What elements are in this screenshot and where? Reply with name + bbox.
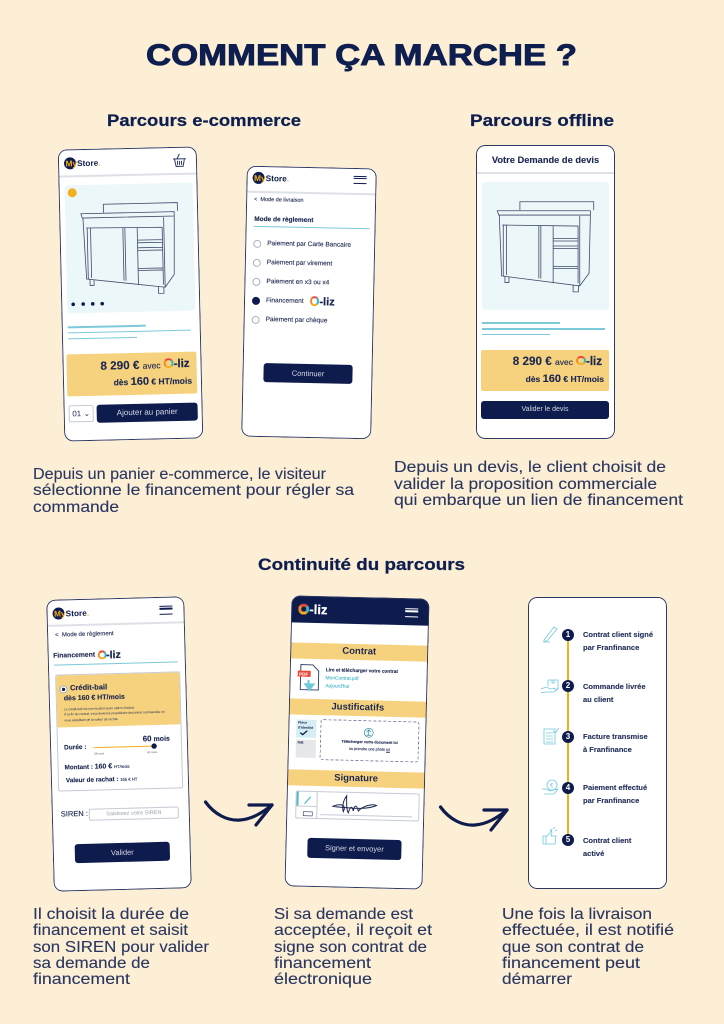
button: continuer bbox=[263, 363, 352, 383]
duration label: Durée : bbox=[64, 744, 87, 751]
step 2: 2 bbox=[566, 681, 570, 690]
duration slider: 60 mois bbox=[147, 750, 158, 754]
header bar bbox=[290, 595, 429, 625]
option legal text: Le crédit-bail est une location avec option d'achat. bbox=[64, 705, 135, 711]
text: step 1 description: sa demande de bbox=[33, 955, 150, 972]
siren input bbox=[89, 806, 179, 821]
illustration: cabinet bbox=[496, 201, 594, 292]
icon: package in hand bbox=[540, 680, 558, 694]
text: offline description: valider la proposition commerciale bbox=[394, 476, 657, 493]
text: step 2 description: électronique bbox=[274, 971, 372, 988]
icon: upload bbox=[364, 728, 374, 738]
option: virement: Paiement par virement bbox=[266, 259, 332, 267]
text: e-commerce description: sélectionne le financement pour régler sa bbox=[33, 482, 354, 499]
tile: pièce d'identité: d'identité bbox=[297, 725, 313, 729]
step 2 bbox=[540, 680, 646, 704]
logo: e-liz bbox=[576, 356, 602, 368]
upload text: Télécharger votre document ici bbox=[341, 739, 397, 744]
text: step 1 description: son SIREN pour valider bbox=[33, 939, 210, 956]
text: e-commerce description: commande bbox=[33, 499, 119, 516]
breadcrumb: < Mode de règlement bbox=[55, 631, 114, 639]
step text bbox=[583, 834, 631, 860]
tile: pièce d'identité bbox=[296, 719, 316, 737]
button: signer et envoyer bbox=[307, 837, 401, 860]
step text: Contrat client bbox=[583, 836, 631, 845]
step 5 bbox=[542, 830, 662, 856]
step 3: 3 bbox=[566, 732, 570, 741]
button: valider le devis: Valider le devis bbox=[522, 406, 568, 413]
contract text bbox=[325, 668, 398, 689]
duration value: 60 mois bbox=[143, 734, 170, 743]
residual value: Valeur de rachat : 165 € HT bbox=[66, 776, 137, 784]
text: step 3 description: effectuée, il est notifié bbox=[502, 922, 674, 939]
step text bbox=[583, 732, 648, 754]
band: justificatifs bbox=[288, 698, 427, 717]
icon: euro in hand: € bbox=[550, 784, 554, 790]
step text: Facture transmise bbox=[583, 732, 648, 741]
icon: invoice bbox=[544, 728, 560, 744]
icon: menu bbox=[353, 175, 366, 184]
step 5: 5 bbox=[566, 835, 570, 844]
card header bbox=[56, 672, 181, 728]
option legal text bbox=[64, 705, 165, 722]
icon: PDF download bbox=[298, 664, 320, 692]
duration slider bbox=[93, 743, 158, 756]
heading: payment mode: Mode de règlement bbox=[254, 215, 313, 224]
price box bbox=[66, 352, 197, 396]
timeline line bbox=[567, 635, 569, 840]
text: step 1 description: financement et saisit bbox=[33, 922, 189, 939]
contract text: MonContrat.pdf bbox=[325, 676, 358, 682]
step 1: 1 bbox=[566, 630, 570, 639]
price text: 8 290 € avec bbox=[513, 355, 573, 368]
logo: MyStore: MyStore. bbox=[54, 608, 89, 619]
heading: continuité du parcours: Continuité du parcours bbox=[258, 555, 465, 574]
icon: PDF download: PDF bbox=[299, 671, 308, 676]
text: step 3 description: démarrer bbox=[502, 971, 573, 988]
panel: phone quote bbox=[476, 145, 615, 439]
contract text: Lire et télécharger votre contrat bbox=[325, 668, 398, 674]
option name: Crédit-bail bbox=[70, 682, 107, 692]
monthly price: dès 160 € HT/mois bbox=[526, 373, 604, 385]
option: financement e-liz: Financement bbox=[265, 297, 303, 304]
button: valider: Valider bbox=[111, 847, 134, 857]
panel: phone contract signature bbox=[284, 595, 429, 889]
breadcrumb: < Mode de livraison bbox=[254, 196, 303, 203]
radio selected bbox=[59, 685, 67, 693]
text: step 3 description: que son contrat de bbox=[502, 939, 644, 956]
text: step 1 description bbox=[33, 906, 210, 988]
step text: par Franfinance bbox=[583, 796, 639, 805]
band: contrat bbox=[290, 642, 428, 661]
duration slider: 36 mois bbox=[94, 751, 105, 756]
logo: e-liz: -liz bbox=[309, 601, 327, 617]
arrow: phone 4 to phone 5 bbox=[206, 802, 272, 825]
button: add to cart bbox=[96, 403, 197, 423]
step text: Commande livrée bbox=[583, 682, 646, 691]
carousel dots bbox=[71, 302, 104, 306]
contract text: Aujourd'hui bbox=[325, 683, 349, 689]
logo: e-liz: -liz bbox=[586, 356, 602, 368]
text: step 3 description: financement peut bbox=[502, 955, 641, 972]
text: step 3 description bbox=[502, 906, 674, 988]
step text bbox=[583, 682, 646, 704]
option: financement e-liz bbox=[252, 296, 334, 308]
heading: financement e-liz: Financement bbox=[53, 652, 95, 660]
icon: pen bbox=[543, 626, 558, 642]
text: step 1 description: Il choisit la durée de bbox=[33, 906, 189, 923]
icon: euro in hand bbox=[541, 779, 561, 795]
title: COMMENT ÇA MARCHE ? bbox=[146, 39, 577, 72]
step text: activé bbox=[583, 849, 604, 858]
option: chèque: Paiement par chèque bbox=[265, 316, 327, 324]
upload dropzone bbox=[319, 718, 419, 762]
heading: parcours e-commerce: Parcours e-commerce bbox=[107, 111, 301, 130]
step text: à Franfinance bbox=[583, 745, 632, 754]
heading: parcours offline: Parcours offline bbox=[470, 111, 614, 130]
icon: basket bbox=[172, 154, 186, 167]
text: step 3 description: Une fois la livraison bbox=[502, 906, 652, 923]
step text: au client bbox=[583, 695, 613, 704]
panel: phone payment mode bbox=[241, 165, 376, 439]
logo: e-liz: -liz bbox=[173, 358, 189, 370]
tile: pièce d'identité: Pièce bbox=[297, 720, 307, 724]
step text bbox=[583, 781, 647, 807]
button: valider le devis bbox=[481, 401, 609, 419]
icon: menu bbox=[405, 608, 418, 616]
signature scribble bbox=[332, 794, 378, 814]
text: step 2 description: signe son contrat de bbox=[274, 939, 427, 956]
step 1 bbox=[543, 626, 653, 652]
panel: phone financing options bbox=[46, 596, 192, 892]
icon: pen and keyboard bbox=[302, 796, 313, 816]
text: offline description: qui embarque un lien de financement bbox=[394, 492, 684, 509]
option legal text: vous acquittant de la valeur de rachat. bbox=[64, 717, 118, 722]
step text: Paiement effectué bbox=[583, 783, 647, 792]
band: contrat: Contrat bbox=[342, 645, 376, 657]
quantity select: 01 ⌄ bbox=[72, 409, 90, 418]
card: crédit-bail bbox=[55, 671, 183, 792]
text: e-commerce description: Depuis un panier e-commerce, le visiteur bbox=[33, 466, 327, 483]
button: continuer: Continuer bbox=[291, 368, 324, 378]
price box bbox=[481, 350, 609, 391]
text: offline description bbox=[394, 459, 684, 509]
upload dropzone: ou prendre une photo ici bbox=[348, 746, 389, 751]
tile: RIB bbox=[295, 739, 316, 757]
logo: MyStore: MyStore. bbox=[65, 158, 100, 168]
band: signature bbox=[286, 769, 425, 788]
siren input: Saisissez votre SIREN bbox=[106, 810, 162, 817]
panel: phone timeline bbox=[528, 597, 667, 889]
logo: e-liz bbox=[164, 358, 190, 370]
button: add to cart: Ajouter au panier bbox=[116, 407, 177, 417]
option price: dès 160 € HT/mois bbox=[64, 693, 125, 702]
text: step 2 description: acceptée, il reçoit et bbox=[274, 922, 433, 939]
step 4 bbox=[542, 780, 647, 805]
icon: thumbs up bbox=[542, 827, 558, 845]
quote heading: Votre Demande de devis bbox=[492, 155, 599, 165]
amount: Montant : 160 € HT/mois bbox=[65, 763, 130, 771]
quantity select bbox=[68, 405, 93, 422]
step text: par Franfinance bbox=[583, 642, 639, 652]
siren label: SIREN : bbox=[61, 809, 88, 819]
step text: Contrat client signé bbox=[583, 630, 653, 639]
option legal text: À la fin du contrat, vous devenez propriétaire des biens commandés en bbox=[64, 710, 165, 717]
monthly price: dès 160 € HT/mois bbox=[113, 376, 192, 388]
heading: financement e-liz bbox=[53, 649, 121, 661]
option: x3 ou x4: Paiement en x3 ou x4 bbox=[266, 278, 329, 286]
signature box bbox=[294, 790, 419, 821]
panel: phone product page bbox=[57, 146, 203, 442]
step 4: 4 bbox=[566, 783, 570, 792]
icon: smiley badge bbox=[67, 188, 76, 197]
text: step 2 description: Si sa demande est bbox=[274, 906, 414, 923]
text: e-commerce description bbox=[33, 466, 354, 516]
band: signature: Signature bbox=[334, 772, 378, 784]
icon: menu bbox=[159, 606, 173, 614]
option: carte bancaire: Paiement par Carte Bancaire bbox=[267, 240, 351, 248]
tile: RIB: RIB bbox=[297, 740, 303, 744]
text: step 1 description: financement bbox=[33, 971, 131, 988]
product image panel bbox=[482, 182, 609, 310]
logo: e-liz bbox=[298, 601, 328, 617]
text: step 2 description bbox=[274, 906, 433, 988]
logo: MyStore: MyStore. bbox=[253, 172, 289, 183]
product image panel bbox=[64, 183, 195, 313]
button: valider bbox=[75, 841, 170, 863]
illustration: cabinet bbox=[80, 202, 178, 294]
text: step 2 description: financement bbox=[274, 955, 372, 972]
step text bbox=[583, 630, 653, 652]
button: signer et envoyer: Signer et envoyer bbox=[324, 843, 383, 853]
arrow: phone 5 to phone 6 bbox=[440, 807, 507, 830]
step 3 bbox=[544, 728, 648, 754]
band: justificatifs: Justificatifs bbox=[331, 701, 384, 713]
option: financement e-liz: -liz bbox=[319, 296, 334, 308]
text: offline description: Depuis un devis, le client choisit de bbox=[394, 459, 666, 476]
heading: financement e-liz: -liz bbox=[106, 649, 121, 661]
price text: 8 290 € avec bbox=[100, 358, 160, 372]
